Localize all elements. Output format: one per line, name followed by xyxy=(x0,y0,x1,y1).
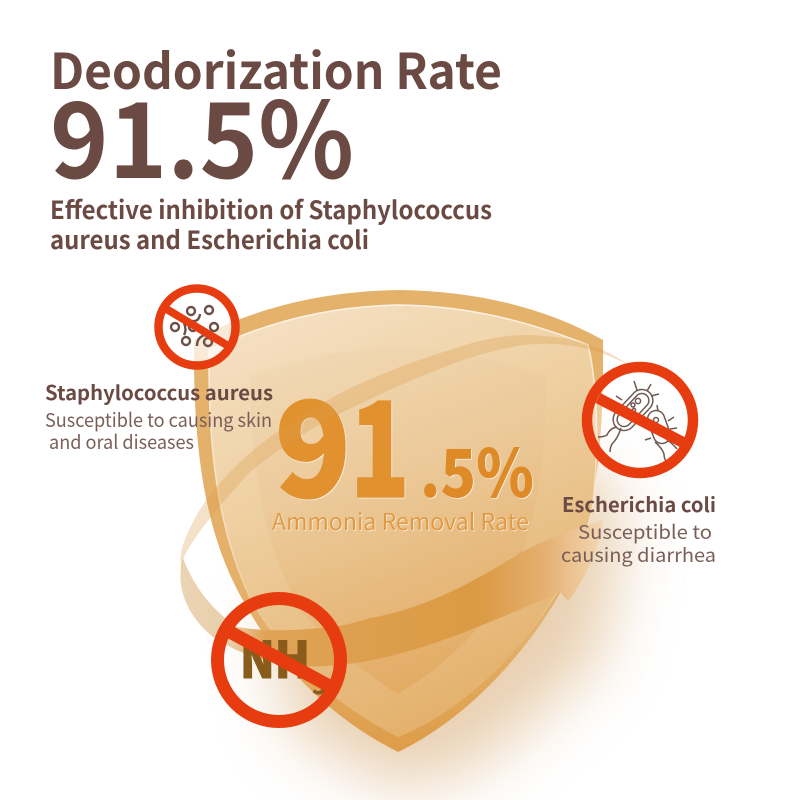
label: Escherichia coli: causing diarrhea xyxy=(561,541,716,568)
big number 91 xyxy=(275,345,410,536)
shield glow shadow xyxy=(270,430,625,790)
label: Staphylococcus aureus: Susceptible to causing skin xyxy=(45,406,272,433)
icon: no ammonia xyxy=(218,598,340,722)
icon: no e. coli xyxy=(587,367,693,473)
orbit ring back arc xyxy=(181,335,632,570)
icon: no staphylococcus xyxy=(158,288,236,366)
shield stat xyxy=(272,345,534,537)
shield center panel xyxy=(250,348,546,694)
headline number: 91.5% xyxy=(50,57,354,209)
shield outer frame xyxy=(194,290,603,752)
big number 91: 9 xyxy=(275,345,351,536)
big number 91: 1 xyxy=(350,345,410,536)
icon: no ammonia: NH xyxy=(240,621,310,693)
orbit ring front band xyxy=(180,520,603,666)
label: Escherichia coli: Escherichia coli xyxy=(562,489,716,518)
icon: no ammonia: 3 xyxy=(312,666,327,701)
shield inner face xyxy=(209,305,597,737)
label: Staphylococcus aureus xyxy=(45,377,273,455)
decimal .5%: .5% xyxy=(420,421,534,517)
subtitle: Effective inhibition of Staphylococcus xyxy=(50,191,492,227)
label: Escherichia coli xyxy=(561,489,716,568)
subtitle xyxy=(50,191,492,257)
shield graphic xyxy=(180,290,603,752)
title: Deodorization Rate xyxy=(50,33,502,104)
label: Staphylococcus aureus: Staphylococcus aureus xyxy=(45,377,273,406)
subtitle: aureus and Escherichia coli xyxy=(50,221,369,257)
stat caption: Ammonia Removal Rate xyxy=(272,503,529,537)
label: Escherichia coli: Susceptible to xyxy=(578,518,712,545)
label: Staphylococcus aureus: and oral diseases xyxy=(49,428,194,455)
